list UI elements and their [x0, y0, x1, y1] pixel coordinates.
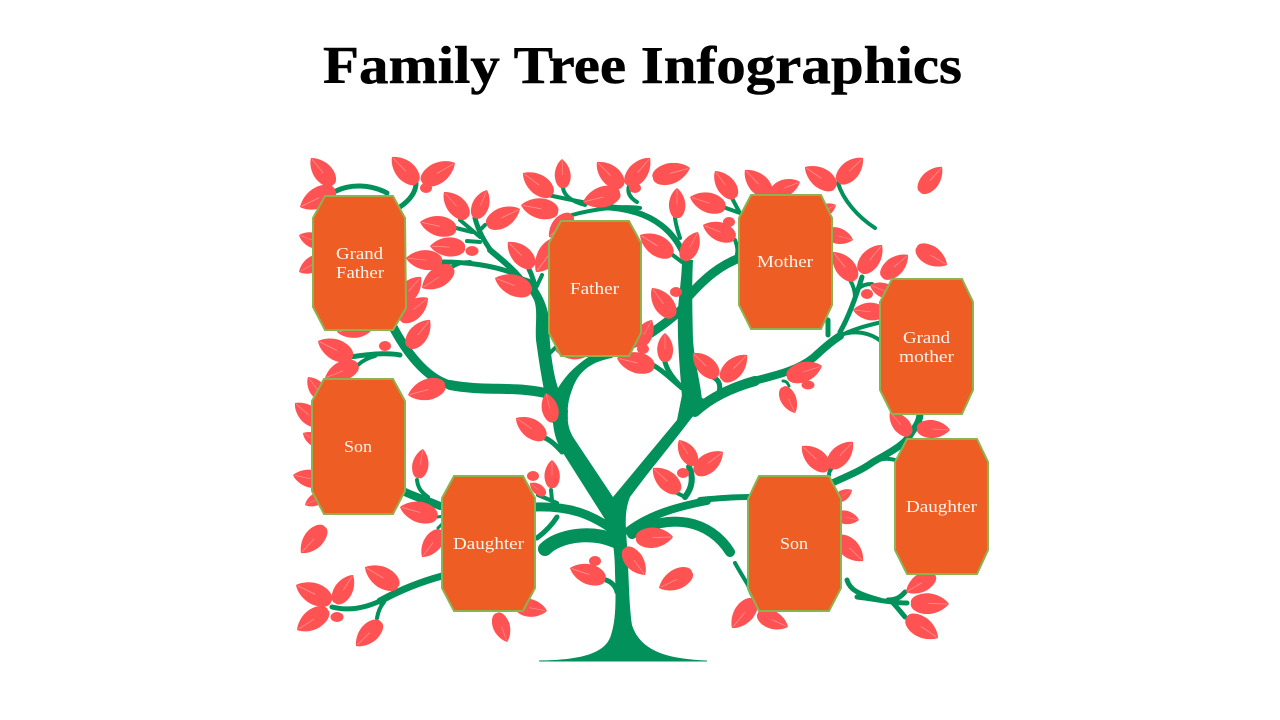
panel: grand father: Grand: [336, 244, 384, 263]
panel: son right: Son: [780, 534, 809, 553]
panel: son right: [748, 476, 841, 611]
tree trunk: [539, 395, 712, 662]
title: Family Tree Infographics: [323, 37, 962, 95]
panel: son left: [312, 379, 405, 514]
panel: father: Father: [570, 279, 619, 298]
panel: father: [549, 221, 641, 356]
panel: daughter left: Daughter: [453, 534, 524, 553]
panel: grand father: [313, 196, 406, 330]
panel: grand father: Father: [336, 263, 384, 282]
main limbs: [678, 260, 702, 400]
berries: [330, 183, 873, 622]
panel: grand mother: [880, 279, 973, 414]
panel: son left: Son: [344, 437, 373, 456]
tree branches: [332, 183, 920, 662]
panel: daughter left: [442, 476, 535, 611]
panel: mother: Mother: [757, 252, 813, 271]
panel: mother: [739, 195, 832, 329]
panel: grand mother: Grand: [903, 328, 951, 347]
leaves: [289, 150, 952, 653]
panel: daughter right: Daughter: [906, 497, 977, 516]
panel: grand mother: mother: [899, 347, 954, 366]
panel: daughter right: [895, 439, 988, 574]
